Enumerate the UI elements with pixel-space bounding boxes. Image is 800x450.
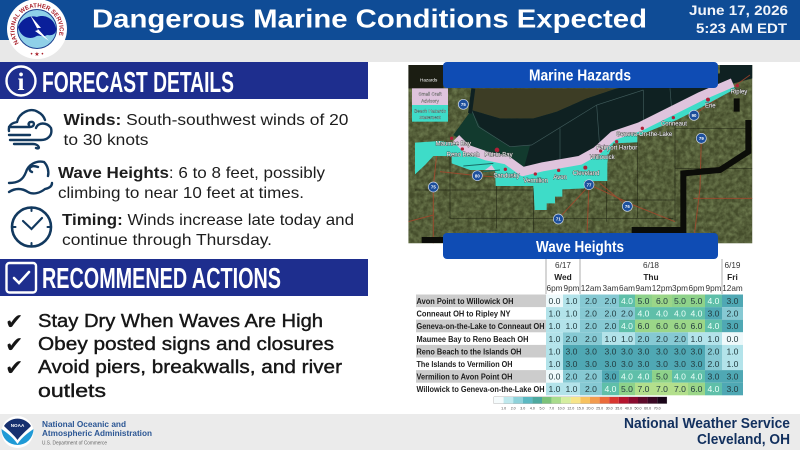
row: Reno Beach to the Islands — [416, 345, 743, 358]
row: The Islands to Vermilion: 3.0 — [638, 359, 650, 369]
row: Vermilion to Avon Point: 3.0 — [708, 372, 720, 382]
map: marine hazards: Erie — [705, 104, 716, 110]
row: Geneva to Conneaut: 2.0 — [585, 321, 597, 331]
list: recommended actions: ✔ — [5, 356, 23, 381]
small craft advisory zone — [456, 83, 733, 172]
legend: colour scale: 2.0 — [511, 406, 516, 410]
map: marine hazards: 90 — [692, 113, 697, 118]
row: Conneaut to Ripley: 1.0 — [566, 309, 578, 319]
map: marine hazards: Small Craft — [418, 92, 442, 97]
row: Willowick to Geneva: 2.0 — [585, 384, 597, 394]
panel: wave heights table — [416, 244, 745, 413]
icon: National Weather Service logo: • ★ • — [31, 51, 43, 58]
city labels: Maumee Bay — [436, 142, 471, 148]
row: Reno Beach to the Islands: 3.0 — [585, 346, 597, 356]
row: Maumee Bay to Reno Beach: 2.0 — [656, 334, 668, 344]
text: winds: to 30 knots — [64, 132, 148, 149]
legend: colour scale: 4.0 — [530, 406, 535, 410]
row: Reno Beach to the Islands: 1.0 — [727, 346, 739, 356]
text: wave heights: climbing to near 10 feet at times. — [58, 185, 304, 202]
column headers: 9pm — [706, 284, 722, 293]
interstate shields — [428, 99, 706, 224]
row: Reno Beach to the Islands: 2.0 — [708, 346, 720, 356]
row: Vermilion to Avon Point: 4.0 — [691, 372, 703, 382]
row: Reno Beach to the Islands: 3.0 — [638, 346, 650, 356]
column headers: Thu — [643, 272, 659, 282]
map: marine hazards: Reno Beach — [447, 153, 480, 159]
legend: colour scale: 30.0 — [606, 406, 613, 410]
legend: colour scale: 3.0 — [520, 406, 525, 410]
column headers: 6/19 — [725, 261, 741, 270]
heading: marine hazards: Marine Hazards — [529, 68, 631, 84]
row: Maumee Bay to Reno Beach: 1.0 — [621, 334, 633, 344]
panel: recommended actions heading: RECOMMENED ACTIONS — [42, 263, 281, 295]
text: winds: Winds: South-southwest winds of 20 — [64, 112, 349, 129]
map: marine hazards: 80 — [475, 173, 480, 178]
row: Maumee Bay to Reno Beach: 0.0 — [727, 334, 739, 344]
legend: colour scale: 5.0 — [540, 406, 544, 410]
panel: forecast details heading: FORECAST DETAILS — [42, 67, 234, 99]
highways — [408, 75, 752, 243]
row: Willowick to Geneva — [416, 383, 743, 395]
row: The Islands to Vermilion: 3.0 — [621, 359, 633, 369]
map: marine hazards: Cleveland — [573, 171, 599, 177]
column headers: 3am — [603, 284, 619, 293]
row: Conneaut to Ripley: 4.0 — [674, 309, 686, 319]
county lines — [415, 118, 752, 232]
row: Reno Beach to the Islands: 3.0 — [566, 346, 578, 356]
map: marine hazards: Conneaut — [661, 121, 687, 127]
icon: checkbox — [6, 263, 36, 292]
icon: information — [6, 66, 36, 96]
row: Conneaut to Ripley: 2.0 — [605, 309, 617, 319]
column headers: 6/17 — [555, 261, 571, 270]
date and time: June 17, 2026 — [689, 2, 788, 18]
text: NOAA name: National Oceanic and — [42, 419, 126, 429]
text: office name: Cleveland, OH — [697, 432, 790, 448]
legend: colour scale: 7.0 — [549, 406, 554, 410]
legend: colour scale: 60.0 — [644, 406, 651, 410]
row: The Islands to Vermilion — [416, 358, 743, 370]
row: Avon Point to Willowick: Avon Point to Willowick OH — [416, 296, 514, 306]
list: recommended actions: Obey posted signs and closures — [38, 334, 334, 354]
list: recommended actions: ✔ — [5, 333, 23, 358]
list: recommended actions: Avoid piers, breakwalls, and river — [38, 357, 342, 377]
row: Reno Beach to the Islands: 3.0 — [656, 346, 668, 356]
row: Vermilion to Avon Point: 4.0 — [621, 372, 633, 382]
column headers: 9pm — [564, 284, 580, 293]
row: Reno Beach to the Islands: 3.0 — [605, 346, 617, 356]
legend: colour scale: 70.0 — [654, 406, 661, 410]
dark masked area — [632, 98, 748, 243]
row: Maumee Bay to Reno Beach: 1.0 — [691, 334, 703, 344]
list: recommended actions: Stay Dry When Waves Are High — [38, 311, 323, 331]
icon: waves — [9, 162, 52, 193]
heading: wave heights: Wave Heights — [536, 239, 624, 256]
row: Geneva to Conneaut: 6.0 — [638, 321, 650, 331]
legend: colour scale: 35.0 — [615, 406, 622, 410]
row: Vermilion to Avon Point: 4.0 — [638, 372, 650, 382]
map: marine hazards: Vermilion — [523, 178, 548, 184]
row: Willowick to Geneva: 3.0 — [727, 384, 739, 394]
row: Conneaut to Ripley: 4.0 — [656, 309, 668, 319]
heading: marine hazards — [443, 62, 718, 88]
row: The Islands to Vermilion: 2.0 — [708, 359, 720, 369]
row: Avon Point to Willowick: 5.0 — [691, 296, 703, 306]
row: Vermilion to Avon Point: Vermilion to Avon Point OH — [416, 372, 512, 382]
map: marine hazards: Put-in-Bay — [485, 153, 513, 159]
text: winds — [64, 112, 349, 149]
map: marine hazards — [408, 65, 752, 243]
row: Vermilion to Avon Point: 3.0 — [605, 372, 617, 382]
city markers — [450, 84, 739, 176]
column headers: 12am — [722, 284, 743, 293]
column headers: 3pm — [672, 284, 688, 293]
row: Willowick to Geneva: 4.0 — [605, 384, 617, 394]
row: Reno Beach to the Islands: 3.0 — [691, 346, 703, 356]
text: NOAA name: U.S. Department of Commerce — [42, 440, 107, 446]
column headers — [546, 259, 743, 294]
row: Vermilion to Avon Point: 2.0 — [585, 372, 597, 382]
icon: information: i — [18, 69, 25, 96]
legend: colour scale: 25.0 — [596, 406, 603, 410]
row: Avon Point to Willowick: 5.0 — [638, 296, 650, 306]
row: Geneva to Conneaut — [416, 320, 743, 332]
row: Conneaut to Ripley — [416, 307, 743, 320]
row: The Islands to Vermilion: 1.0 — [549, 359, 561, 369]
text: wave heights: Wave Heights : 6 to 8 feet, possibly — [58, 165, 325, 182]
map: marine hazards: 76 — [625, 204, 630, 209]
map: marine hazards: Fairport Harbor — [597, 145, 637, 151]
legend: colour scale: 1.0 — [501, 406, 506, 410]
row: The Islands to Vermilion: 1.0 — [727, 359, 739, 369]
row: Avon Point to Willowick: 0.0 — [549, 296, 561, 306]
column headers: 6pm — [547, 284, 563, 293]
row: Geneva to Conneaut: 6.0 — [691, 321, 703, 331]
row: Willowick to Geneva: 7.0 — [638, 384, 650, 394]
legend: colour scale: 50.0 — [634, 406, 642, 410]
row: Avon Point to Willowick: 6.0 — [656, 296, 668, 306]
icon: clock — [12, 208, 51, 246]
row: Geneva to Conneaut: 6.0 — [674, 321, 686, 331]
text: timing: Timing: Winds increase late today and — [62, 212, 354, 229]
row: Maumee Bay to Reno Beach: 1.0 — [605, 334, 617, 344]
row: The Islands to Vermilion: 3.0 — [566, 359, 578, 369]
row: Conneaut to Ripley: Conneaut OH to Ripley NY — [416, 309, 511, 319]
row: Geneva to Conneaut: Geneva-on-the-Lake to Conneaut OH — [416, 321, 544, 331]
row: Vermilion to Avon Point: 0.0 — [549, 372, 561, 382]
row: Vermilion to Avon Point — [416, 370, 743, 383]
map: marine hazards: 75 — [431, 185, 436, 190]
text: timing — [62, 212, 354, 249]
row: Reno Beach to the Islands: 3.0 — [621, 346, 633, 356]
row: Willowick to Geneva: 6.0 — [691, 384, 703, 394]
legend: colour scale — [494, 397, 667, 410]
legend: colour scale: 15.0 — [577, 406, 584, 410]
map: marine hazards: 75 — [461, 102, 466, 107]
row: Willowick to Geneva: 1.0 — [549, 384, 561, 394]
map: marine hazards: Sandusky — [493, 174, 520, 180]
map: marine hazards: Advisory — [421, 98, 440, 103]
row: The Islands to Vermilion: The Islands to Vermilion OH — [416, 359, 512, 369]
map: marine hazards: Avon — [553, 175, 567, 181]
icon: National Weather Service logo: NATIONAL WEATHER SERVICE — [10, 3, 64, 46]
text: timing: continue through Thursday. — [62, 232, 272, 249]
column headers: Fri — [727, 272, 738, 282]
legend: colour scale: 40.0 — [625, 406, 632, 410]
row: Geneva to Conneaut: 4.0 — [621, 321, 633, 331]
row: The Islands to Vermilion: 3.0 — [605, 359, 617, 369]
icon: NOAA logo: NOAA — [11, 423, 25, 428]
list: recommended actions — [5, 310, 342, 401]
row: Geneva to Conneaut: 2.0 — [605, 321, 617, 331]
map: marine hazards: Ripley — [731, 89, 747, 95]
header banner — [0, 0, 800, 40]
map: marine hazards: Geneva-On-the-Lake — [616, 132, 673, 138]
row: The Islands to Vermilion: 3.0 — [674, 359, 686, 369]
text: office name: National Weather Service — [624, 416, 790, 432]
row: Avon Point to Willowick: 2.0 — [605, 296, 617, 306]
legend: colour scale: 12.0 — [567, 406, 574, 410]
map: marine hazards: 71 — [556, 217, 561, 222]
row: The Islands to Vermilion: 3.0 — [691, 359, 703, 369]
row: Willowick to Geneva: 1.0 — [566, 384, 578, 394]
row: Avon Point to Willowick: 4.0 — [621, 296, 633, 306]
map: marine hazards: Statement — [419, 115, 441, 120]
row: Conneaut to Ripley: 2.0 — [585, 309, 597, 319]
column headers: 12am — [581, 284, 601, 293]
row: Geneva to Conneaut: 4.0 — [708, 321, 720, 331]
row: Geneva to Conneaut: 6.0 — [656, 321, 668, 331]
row: Maumee Bay to Reno Beach: 1.0 — [708, 334, 720, 344]
row: Avon Point to Willowick: 2.0 — [585, 296, 597, 306]
map legend — [412, 88, 448, 105]
title: Dangerous Marine Conditions Expected — [92, 4, 647, 34]
icon: National Weather Service logo — [7, 0, 67, 59]
row: Conneaut to Ripley: 1.0 — [549, 309, 561, 319]
map: marine hazards: Hazards — [420, 78, 438, 83]
row: Maumee Bay to Reno Beach: 1.0 — [549, 334, 561, 344]
row: Geneva to Conneaut: 1.0 — [549, 321, 561, 331]
text: NOAA name: Atmospheric Administration — [42, 428, 152, 438]
legend: colour scale: 10.0 — [558, 406, 565, 410]
panel: forecast details heading — [0, 62, 368, 99]
column headers: 12pm — [652, 284, 672, 293]
date and time — [689, 2, 788, 36]
date and time: 5:23 AM EDT — [696, 20, 787, 36]
row: The Islands to Vermilion: 3.0 — [585, 359, 597, 369]
row: Willowick to Geneva: 7.0 — [656, 384, 668, 394]
row: Conneaut to Ripley: 4.0 — [691, 309, 703, 319]
row: Maumee Bay to Reno Beach: 2.0 — [674, 334, 686, 344]
row: Vermilion to Avon Point: 3.0 — [727, 372, 739, 382]
row: Maumee Bay to Reno Beach — [416, 332, 743, 345]
list: recommended actions: ✔ — [5, 310, 23, 335]
column headers: Wed — [554, 272, 572, 282]
map: marine hazards: 77 — [587, 182, 592, 187]
column headers: 6pm — [689, 284, 705, 293]
row: Maumee Bay to Reno Beach: 2.0 — [566, 334, 578, 344]
column headers: 6am — [619, 284, 635, 293]
map: marine hazards: Beach Hazards — [414, 108, 447, 113]
row: Maumee Bay to Reno Beach: Maumee Bay to Reno Beach OH — [416, 334, 528, 344]
row: Avon Point to Willowick — [416, 294, 743, 307]
beach hazard zone — [415, 83, 735, 210]
row: Reno Beach to the Islands: 1.0 — [549, 346, 561, 356]
row: Vermilion to Avon Point: 4.0 — [674, 372, 686, 382]
column headers: 9am — [636, 284, 652, 293]
heading: wave heights — [443, 233, 718, 259]
row: Conneaut to Ripley: 2.0 — [727, 309, 739, 319]
row: Geneva to Conneaut: 1.0 — [566, 321, 578, 331]
icon: NOAA logo — [2, 416, 34, 448]
row: Conneaut to Ripley: 4.0 — [638, 309, 650, 319]
row: The Islands to Vermilion: 3.0 — [656, 359, 668, 369]
text: office name — [624, 416, 790, 448]
row: Maumee Bay to Reno Beach: 2.0 — [638, 334, 650, 344]
column headers: 6/18 — [643, 261, 659, 270]
row: Conneaut to Ripley: 3.0 — [708, 309, 720, 319]
row: Reno Beach to the Islands: 3.0 — [674, 346, 686, 356]
legend: colour scale: 20.0 — [586, 406, 594, 410]
row: Willowick to Geneva: 5.0 — [621, 384, 633, 394]
row: Willowick to Geneva: 7.0 — [674, 384, 686, 394]
map: marine hazards: Willowick — [590, 155, 615, 161]
map: marine hazards: 79 — [699, 136, 704, 141]
row: Conneaut to Ripley: 2.0 — [621, 309, 633, 319]
row: Willowick to Geneva: Willowick to Geneva-on-the-Lake OH — [416, 384, 544, 394]
row: Vermilion to Avon Point: 2.0 — [566, 372, 578, 382]
row: Willowick to Geneva: 4.0 — [708, 384, 720, 394]
list: recommended actions: outlets — [38, 381, 106, 401]
row: Maumee Bay to Reno Beach: 2.0 — [585, 334, 597, 344]
footer — [0, 414, 800, 450]
row: Vermilion to Avon Point: 5.0 — [656, 372, 668, 382]
row: Avon Point to Willowick: 1.0 — [566, 296, 578, 306]
row: Avon Point to Willowick: 5.0 — [674, 296, 686, 306]
row: Avon Point to Willowick: 4.0 — [708, 296, 720, 306]
text: wave heights — [58, 165, 325, 202]
row: Reno Beach to the Islands: Reno Beach to the Islands OH — [416, 346, 522, 356]
row: Avon Point to Willowick: 3.0 — [727, 296, 739, 306]
icon: wind and cloud — [9, 110, 51, 148]
row: Geneva to Conneaut: 3.0 — [727, 321, 739, 331]
text: NOAA name — [42, 419, 152, 446]
